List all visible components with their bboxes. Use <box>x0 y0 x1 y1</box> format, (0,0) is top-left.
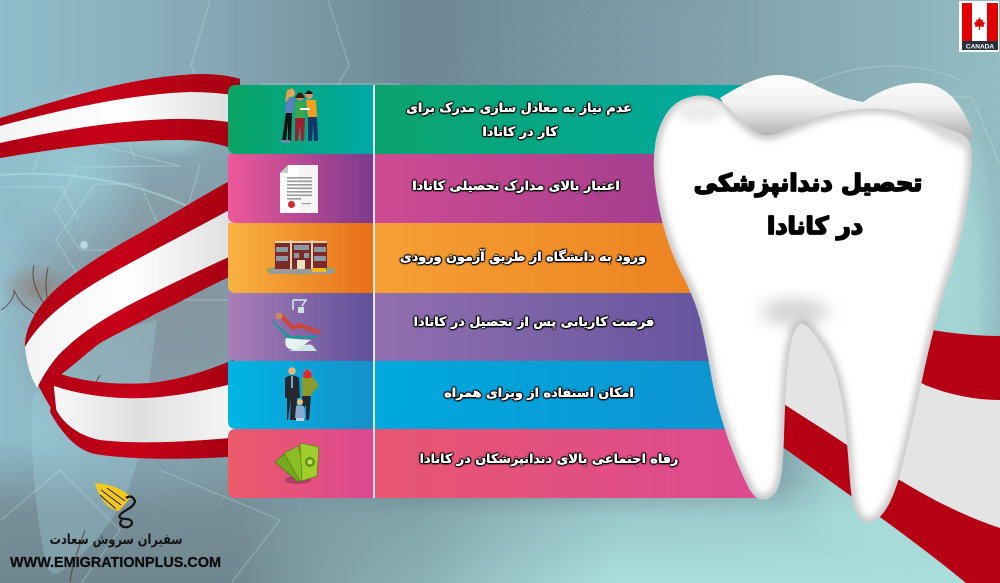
icon: university building <box>266 240 336 274</box>
icon: banknotes <box>275 443 319 484</box>
text: row 5: امکان استفاده از ویزای همراه <box>444 386 634 401</box>
tooth illustration <box>654 75 975 523</box>
icon: winged S emblem <box>95 483 135 527</box>
ribbon: third lower band <box>50 357 240 459</box>
x-ray tooth root <box>32 320 157 574</box>
ribbon: top band <box>0 74 240 158</box>
ribbon: right band <box>760 290 1000 583</box>
icon: maple leaf <box>974 17 985 30</box>
text: row 3: ورود به دانشگاه از طریق آزمون ورودی <box>400 249 646 265</box>
row 3: university entrance <box>228 223 745 293</box>
brand name: سفیران سروش سعادت <box>50 532 182 548</box>
title: در کانادا <box>767 212 863 240</box>
flag: Canada: CANADA <box>966 44 994 50</box>
row 2: credentials <box>228 154 745 223</box>
text: row 4: فرصت کاریابی پس از تحصیل در کانادا <box>414 315 654 330</box>
text: row 1: عدم نیاز به معادل سازی مدرک برای <box>406 101 632 116</box>
logo <box>10 483 221 571</box>
flag: Canada <box>959 1 999 52</box>
vertical divider line <box>373 85 375 498</box>
row 4: job opportunity <box>228 293 745 361</box>
title: تحصیل دندانپزشکی <box>694 169 922 197</box>
text: row 1: کار در کانادا <box>482 125 558 140</box>
row 5: companion visa <box>228 361 745 429</box>
text: row 6: رفاه اجتماعی بالای دندانپزشکان در کانادا <box>420 452 678 467</box>
icon: three people with a book <box>281 88 318 143</box>
icon: dental chair with patient <box>272 300 321 351</box>
ribbon: second diagonal band <box>25 176 240 417</box>
title <box>694 169 922 240</box>
row 6: social welfare <box>228 429 757 498</box>
text: row 2: اعتبار بالای مدارک تحصیلی کانادا <box>412 179 620 194</box>
icon: certificate document <box>280 165 318 213</box>
text: row 1 <box>406 101 632 140</box>
icon: family <box>285 367 319 421</box>
website url: WWW.EMIGRATIONPLUS.COM <box>10 554 221 571</box>
row 1: degree recognition <box>228 85 745 154</box>
